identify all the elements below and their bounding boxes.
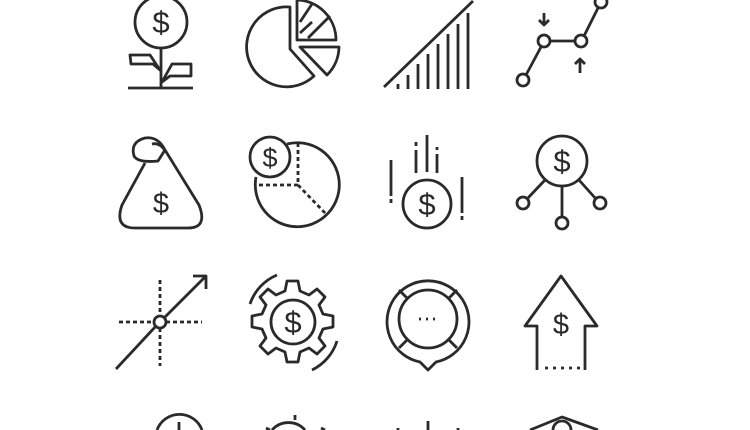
icon: line chart nodes <box>517 0 607 86</box>
icon: money network: $ <box>553 144 571 179</box>
icon: growth bar chart <box>384 1 473 89</box>
icon: lifebuoy chat <box>387 281 469 370</box>
icon: falling coin: $ <box>418 187 436 222</box>
icon: growth arrow crosshair <box>116 276 206 369</box>
icon: money plant: $ <box>152 5 170 40</box>
icon: coin pie <box>250 137 339 227</box>
icon: money bag <box>120 138 202 228</box>
icon: money network <box>517 136 606 229</box>
icon: money plant <box>128 0 193 88</box>
icon: coin pie: $ <box>262 143 278 173</box>
icon: money gear: $ <box>284 305 302 340</box>
partial row 4 icons <box>157 414 598 430</box>
icon: money bag: $ <box>153 188 169 220</box>
icon: money gear <box>250 275 337 370</box>
icon: house arrow dollar <box>525 276 597 370</box>
icon: pie chart <box>247 0 339 87</box>
icon: house arrow dollar: $ <box>553 309 569 341</box>
icon: falling coin <box>391 135 462 228</box>
